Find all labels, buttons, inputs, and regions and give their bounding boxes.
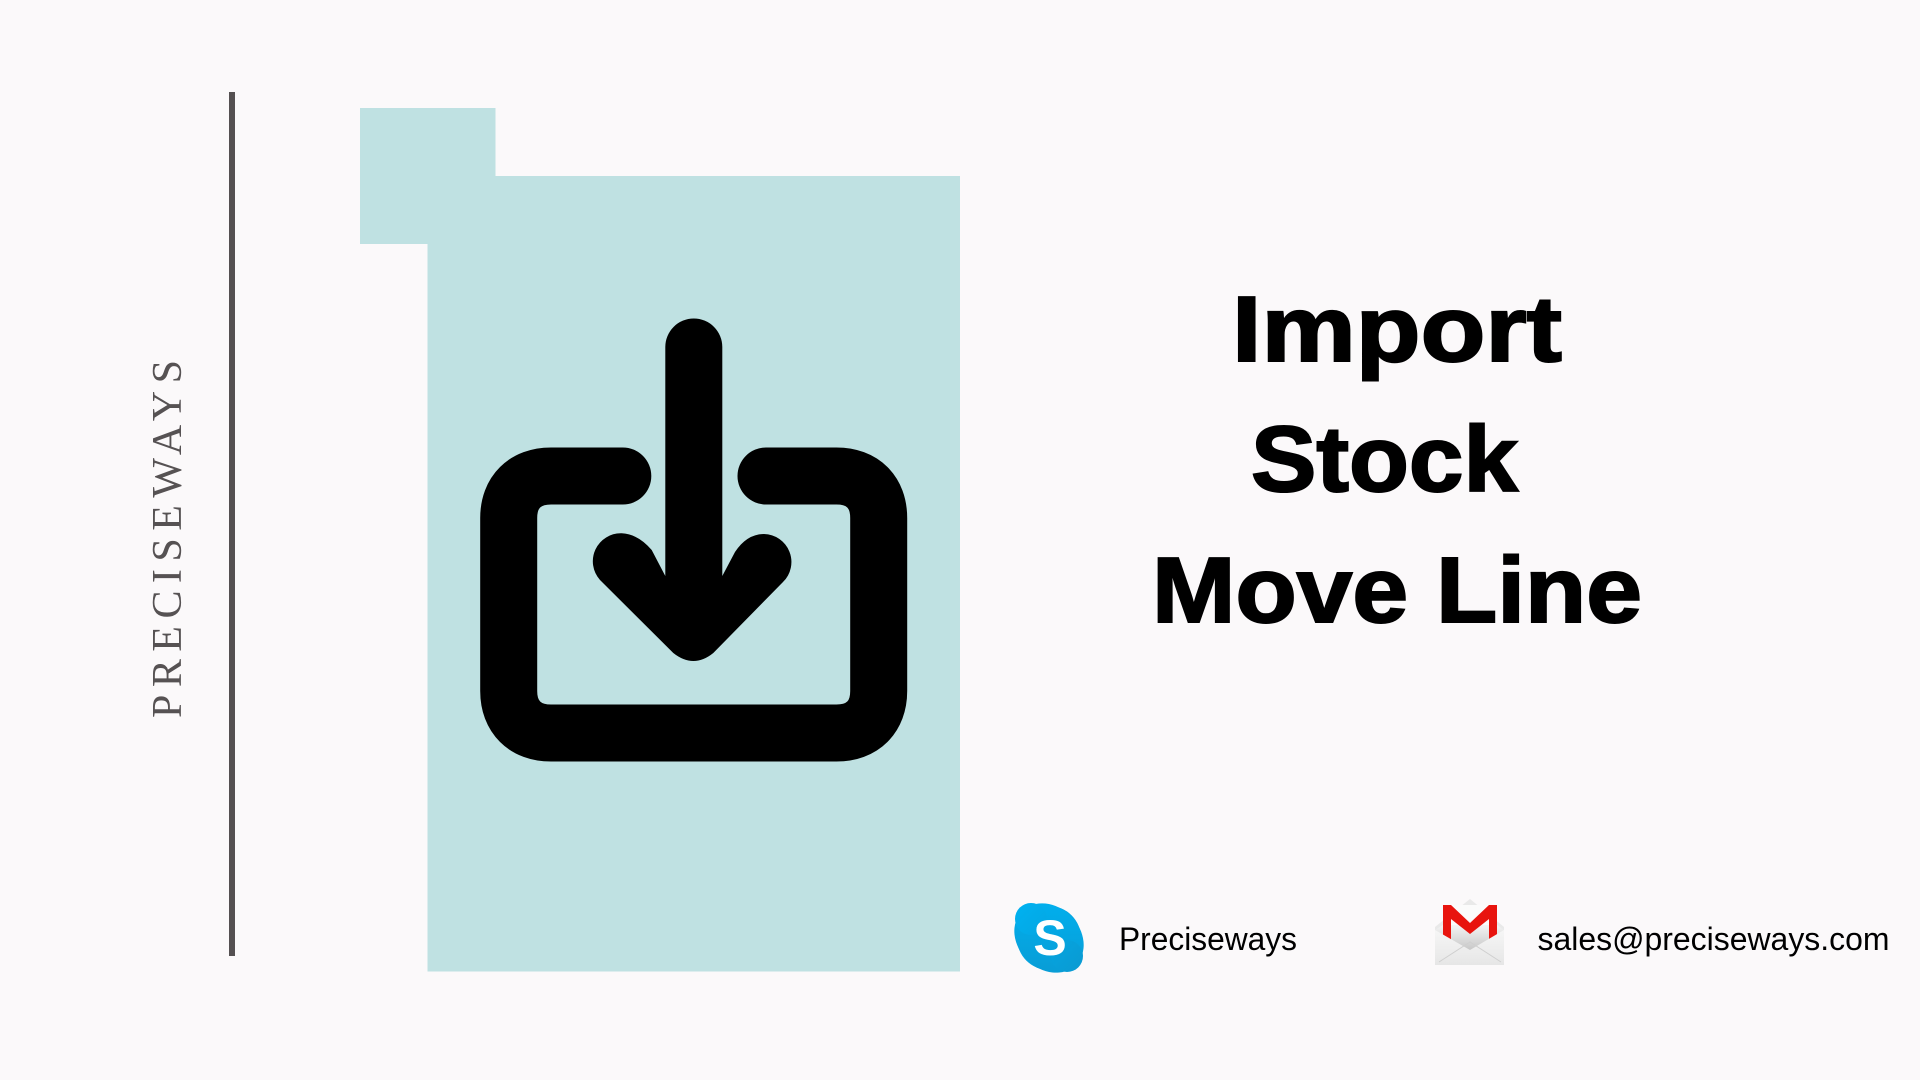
icon: skype: S — [1033, 910, 1067, 966]
icon: tray outline — [509, 476, 879, 733]
email address: sales@preciseways.com — [1538, 921, 1890, 957]
vertical rule — [229, 92, 235, 956]
title — [1152, 277, 1642, 642]
title line: Stock: Stock — [1251, 407, 1518, 511]
brand label: PRECISEWAYS: PRECISEWAYS — [145, 360, 191, 718]
icon: import arrow into tray — [509, 318, 879, 733]
icon: down arrow — [593, 318, 791, 661]
icon: skype — [1000, 889, 1098, 987]
title line: Import: Import — [1232, 277, 1562, 381]
title line: Move Line: Move Line — [1152, 538, 1642, 642]
panel: teal stepped background — [360, 108, 960, 972]
skype name: Preciseways — [1119, 921, 1297, 957]
icon: gmail envelope — [1435, 899, 1504, 965]
